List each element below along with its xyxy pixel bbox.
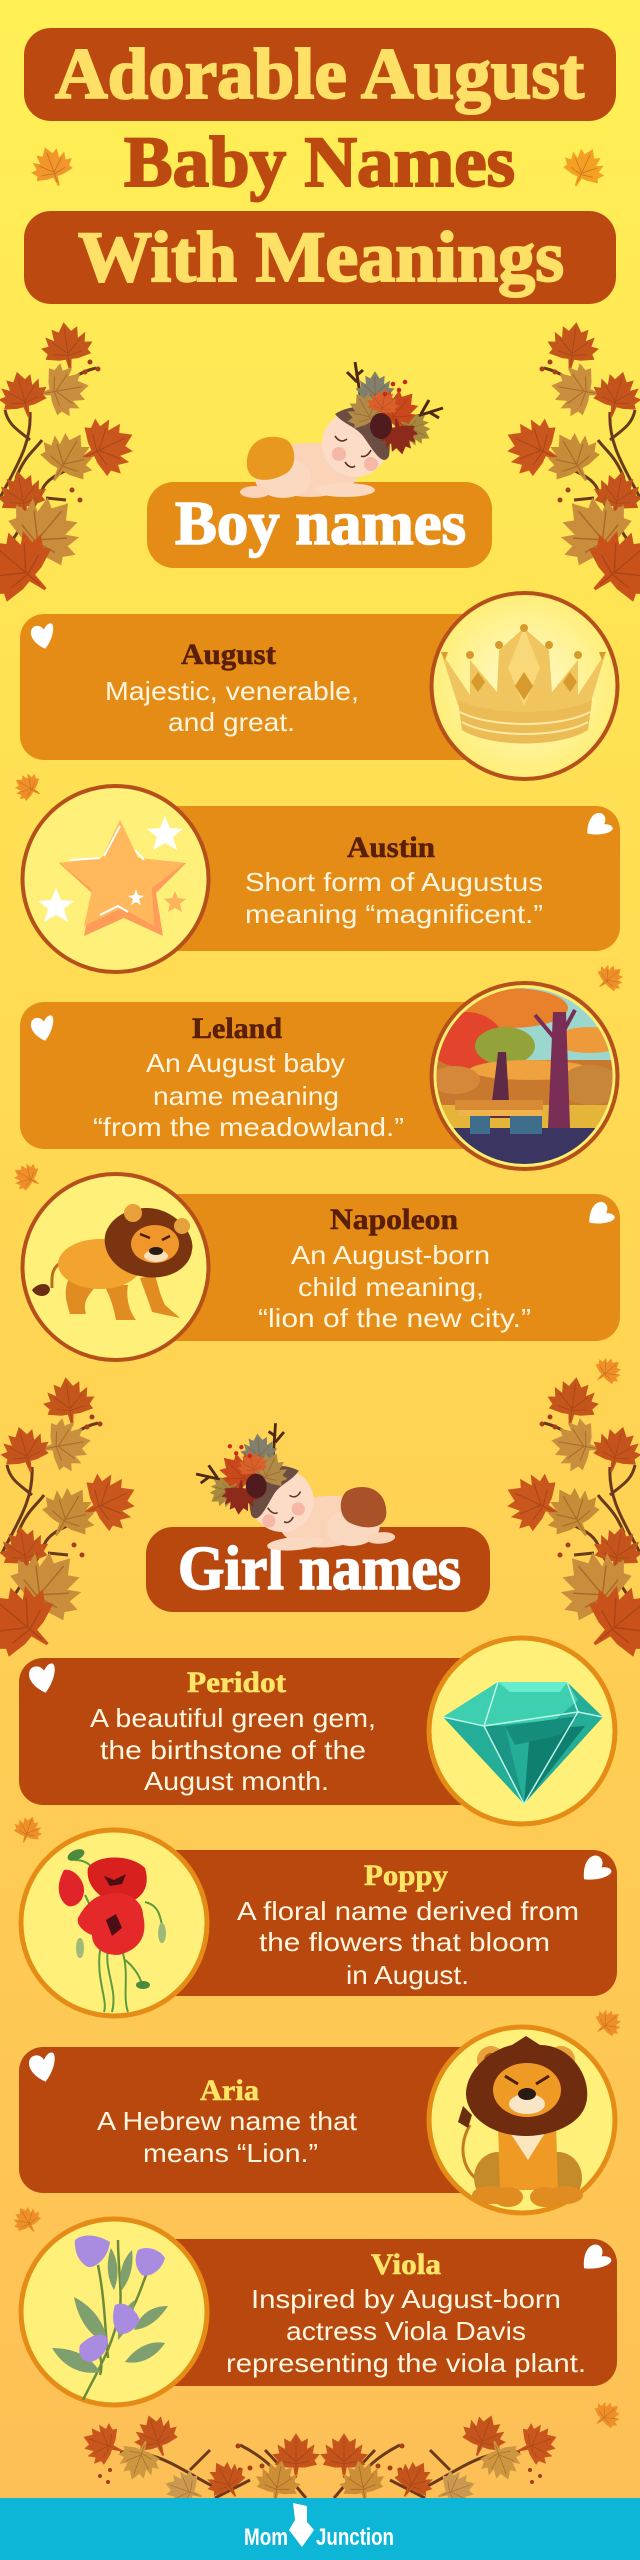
description: Inspired by August-born — [251, 2284, 561, 2314]
title line 2: Baby Names — [124, 122, 515, 202]
leaf accent — [590, 958, 630, 998]
icon: sleeping baby girl — [192, 1414, 396, 1559]
description: August month. — [144, 1766, 329, 1796]
description: A floral name derived from — [237, 1896, 579, 1926]
heading: Girl names — [146, 1527, 490, 1612]
icon: autumn park — [427, 983, 626, 1169]
name: Viola — [371, 2248, 441, 2281]
description — [245, 867, 543, 929]
description — [258, 1240, 531, 1333]
name: Napoleon — [330, 1203, 458, 1236]
icon: title leaf left — [25, 140, 79, 193]
description: child meaning, — [298, 1272, 484, 1302]
leaf accent — [7, 2201, 46, 2239]
description: A Hebrew name that — [97, 2106, 358, 2136]
leaf accent — [587, 2395, 627, 2435]
description — [105, 676, 359, 737]
decoration: bottom garland left — [76, 2408, 320, 2516]
icon: green gem — [429, 1638, 615, 1824]
leaf accent — [588, 2003, 628, 2043]
decoration: boy section branch right — [495, 319, 640, 619]
description: the flowers that bloom — [259, 1927, 550, 1957]
title line 1: Adorable August — [55, 34, 584, 114]
name: Aria — [200, 2074, 259, 2107]
title — [24, 28, 616, 304]
description: Short form of Augustus — [245, 867, 543, 897]
description — [97, 2106, 358, 2168]
icon: title leaf right — [556, 140, 612, 195]
decoration: girl section branch left — [0, 1374, 147, 1674]
description: An August-born — [291, 1240, 490, 1270]
icon: heart — [576, 1852, 613, 1889]
icon: heart — [581, 810, 614, 843]
panel: Austin — [22, 786, 620, 972]
icon: sleeping baby boy — [240, 362, 443, 498]
description: representing the viola plant. — [226, 2348, 586, 2378]
icon: heart — [30, 1015, 57, 1043]
icon: star — [22, 786, 208, 972]
panel: Napoleon — [22, 1174, 620, 1360]
icon: heart — [28, 1663, 59, 1695]
heading: Girl names: Girl names — [178, 1535, 461, 1603]
name: Peridot — [187, 1666, 286, 1699]
heading: Boy names: Boy names — [175, 490, 466, 558]
decoration: boy section branch left — [0, 319, 145, 619]
name: Leland — [192, 1012, 282, 1045]
panel: Peridot — [19, 1638, 615, 1824]
decoration: girl section branch right — [495, 1374, 640, 1674]
description: and great. — [168, 707, 295, 737]
description: A beautiful green gem, — [90, 1703, 376, 1733]
title line 3 — [24, 211, 616, 304]
icon: heart — [583, 1199, 616, 1232]
footer: MomJunction logo: Mom — [244, 2524, 288, 2551]
leaf accent — [9, 767, 47, 806]
description — [237, 1896, 579, 1990]
description: Majestic, venerable, — [105, 676, 359, 706]
icon: walking lion — [22, 1174, 208, 1360]
title line 3: With Meanings — [78, 217, 564, 297]
description: in August. — [346, 1960, 469, 1990]
icon: viola flowers — [21, 2219, 207, 2405]
name: Austin — [347, 831, 435, 864]
decoration: bottom garland right — [320, 2408, 564, 2516]
icon: logo mother and child — [289, 2503, 314, 2547]
name: Poppy — [364, 1859, 448, 1892]
description — [90, 1703, 376, 1796]
heading: Boy names — [147, 482, 492, 568]
name: August — [181, 638, 276, 671]
panel: August — [20, 593, 618, 779]
panel: Viola — [21, 2219, 617, 2405]
description: An August baby — [146, 1048, 345, 1078]
leaf accent — [588, 1351, 628, 1391]
panel: Poppy — [21, 1830, 617, 2016]
icon: sitting lion — [429, 2027, 615, 2213]
description: name meaning — [153, 1081, 339, 1111]
description: “lion of the new city.” — [258, 1303, 531, 1333]
icon: red poppy — [21, 1830, 207, 2016]
leaf accent — [8, 1157, 46, 1196]
description — [93, 1048, 404, 1142]
icon: heart — [576, 2241, 613, 2278]
icon: heart — [30, 623, 57, 651]
description: “from the meadowland.” — [93, 1112, 404, 1142]
icon: heart — [28, 2052, 59, 2084]
footer: MomJunction logo — [0, 2498, 640, 2560]
description: the birthstone of the — [100, 1735, 366, 1765]
panel: Aria — [19, 2027, 615, 2213]
description: means “Lion.” — [143, 2138, 318, 2168]
leaf accent — [10, 1812, 47, 1848]
description: actress Viola Davis — [286, 2316, 526, 2346]
description: meaning “magnificent.” — [245, 899, 543, 929]
icon: crown — [432, 593, 618, 779]
footer: MomJunction logo: Junction — [316, 2524, 394, 2551]
panel: Leland — [20, 983, 626, 1169]
description — [226, 2284, 586, 2378]
